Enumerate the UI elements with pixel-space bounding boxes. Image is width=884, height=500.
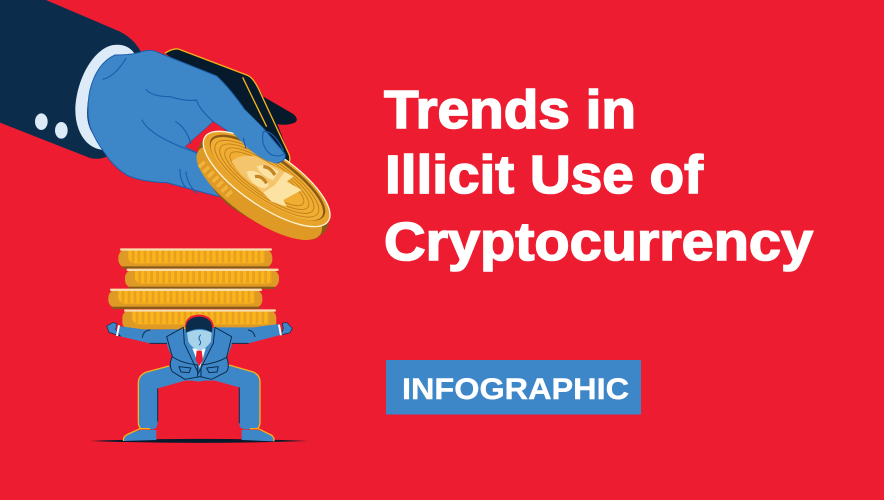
coin face [190,115,343,243]
coin stack [108,248,279,329]
stack coin 4 [122,309,276,329]
illustration: businessman carrying coin stack [90,248,308,443]
title line 1: Trends in [384,80,636,140]
title line 2: Illicit Use of [385,145,704,205]
blue hand [88,50,285,199]
stack coin 3 [108,289,262,309]
badge label: INFOGRAPHIC [402,373,629,406]
card yellow edge [165,49,290,166]
right fist and cuff [279,322,292,335]
cuff buttons [35,113,68,139]
title [384,80,813,272]
infographic badge [386,360,641,414]
shirt cuff [75,45,135,150]
shoes [123,429,274,441]
hand crease lines [103,58,213,193]
dark card behind fingers [165,49,297,167]
red gap between finger and thumb [185,122,240,152]
ground shadow [90,439,308,443]
fingertip over coin [233,110,285,163]
left fist and cuff [107,322,120,336]
head [185,315,214,351]
trouser legs [138,365,260,429]
gold coin [183,115,343,257]
stack coin 2 [125,269,279,289]
suit sleeve [0,0,142,159]
title line 3: Cryptocurrency [384,212,813,272]
stack coin 1 [118,248,272,269]
coin edge [183,129,335,257]
arms and jacket [117,324,280,382]
illustration: hand holding coin [0,0,343,257]
shirt and red tie [192,348,206,368]
bitcoin symbol [232,156,302,207]
